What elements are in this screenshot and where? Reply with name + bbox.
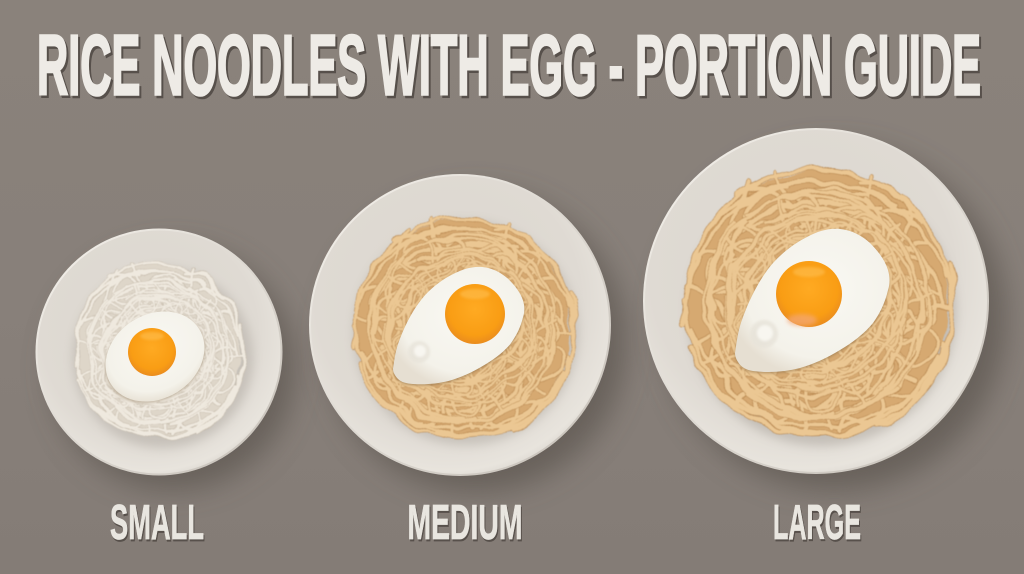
plate: small xyxy=(36,228,282,476)
label: medium: MEDIUM xyxy=(408,498,524,552)
label: large: LARGE xyxy=(773,496,861,550)
noodles: large xyxy=(668,152,968,454)
plate: medium xyxy=(309,174,611,476)
noodles: medium xyxy=(338,202,588,454)
label: medium xyxy=(408,496,524,552)
label: small: SMALL xyxy=(111,498,205,552)
noodles: small rice noodles xyxy=(64,255,254,446)
label: medium: MEDIUM xyxy=(408,496,522,550)
panel: large portion xyxy=(643,128,1006,552)
plate shadow: large xyxy=(662,146,1006,490)
panel: small portion xyxy=(36,228,295,552)
panel: medium portion xyxy=(309,174,626,552)
plate shadow: small xyxy=(51,246,295,490)
egg: medium xyxy=(393,267,524,386)
plate shadow: medium xyxy=(326,192,626,492)
egg: large xyxy=(735,229,890,374)
label: large xyxy=(773,496,862,552)
egg: small xyxy=(88,293,222,422)
label: large: LARGE xyxy=(774,498,862,552)
label: small: SMALL xyxy=(110,496,204,550)
label: small xyxy=(110,496,205,552)
plate: large xyxy=(643,128,989,474)
